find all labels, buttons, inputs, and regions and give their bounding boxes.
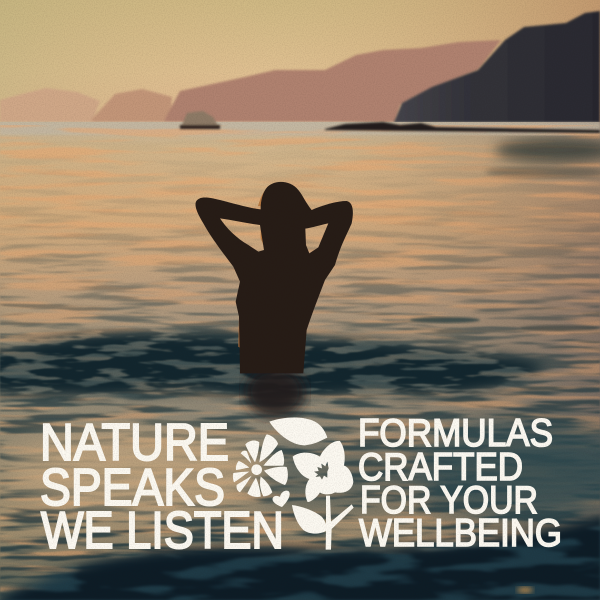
icon: top leaf xyxy=(269,418,327,445)
swimmer silhouette xyxy=(195,182,353,373)
headline: nature speaks we listen: WE LISTEN xyxy=(41,502,284,560)
low rocky spit xyxy=(325,122,600,133)
tagline: formulas crafted for your wellbeing: FORMULAS xyxy=(358,412,553,455)
rock islet xyxy=(180,111,220,129)
icon: daisy xyxy=(233,434,288,497)
icon: stem and lower leaf xyxy=(292,496,354,550)
headline: nature speaks we listen: SPEAKS xyxy=(40,459,225,517)
tagline: formulas crafted for your wellbeing: CRAFTED xyxy=(358,446,523,489)
ripple texture xyxy=(0,125,600,600)
headline: nature speaks we listen: NATURE xyxy=(40,414,229,472)
dark water areas xyxy=(0,138,600,600)
water xyxy=(0,122,600,600)
tagline: formulas crafted for your wellbeing: FOR YOUR xyxy=(360,479,538,522)
tagline: formulas crafted for your wellbeing: WELLBEING xyxy=(359,512,562,555)
botanical emblem xyxy=(233,418,354,550)
icon: open flower xyxy=(293,441,353,502)
tagline: formulas crafted for your wellbeing xyxy=(358,412,562,555)
icon: heart xyxy=(273,491,290,507)
sky background xyxy=(0,0,600,130)
distant mountains xyxy=(0,40,501,122)
dark headland xyxy=(394,11,600,131)
headline: nature speaks we listen xyxy=(40,414,284,560)
